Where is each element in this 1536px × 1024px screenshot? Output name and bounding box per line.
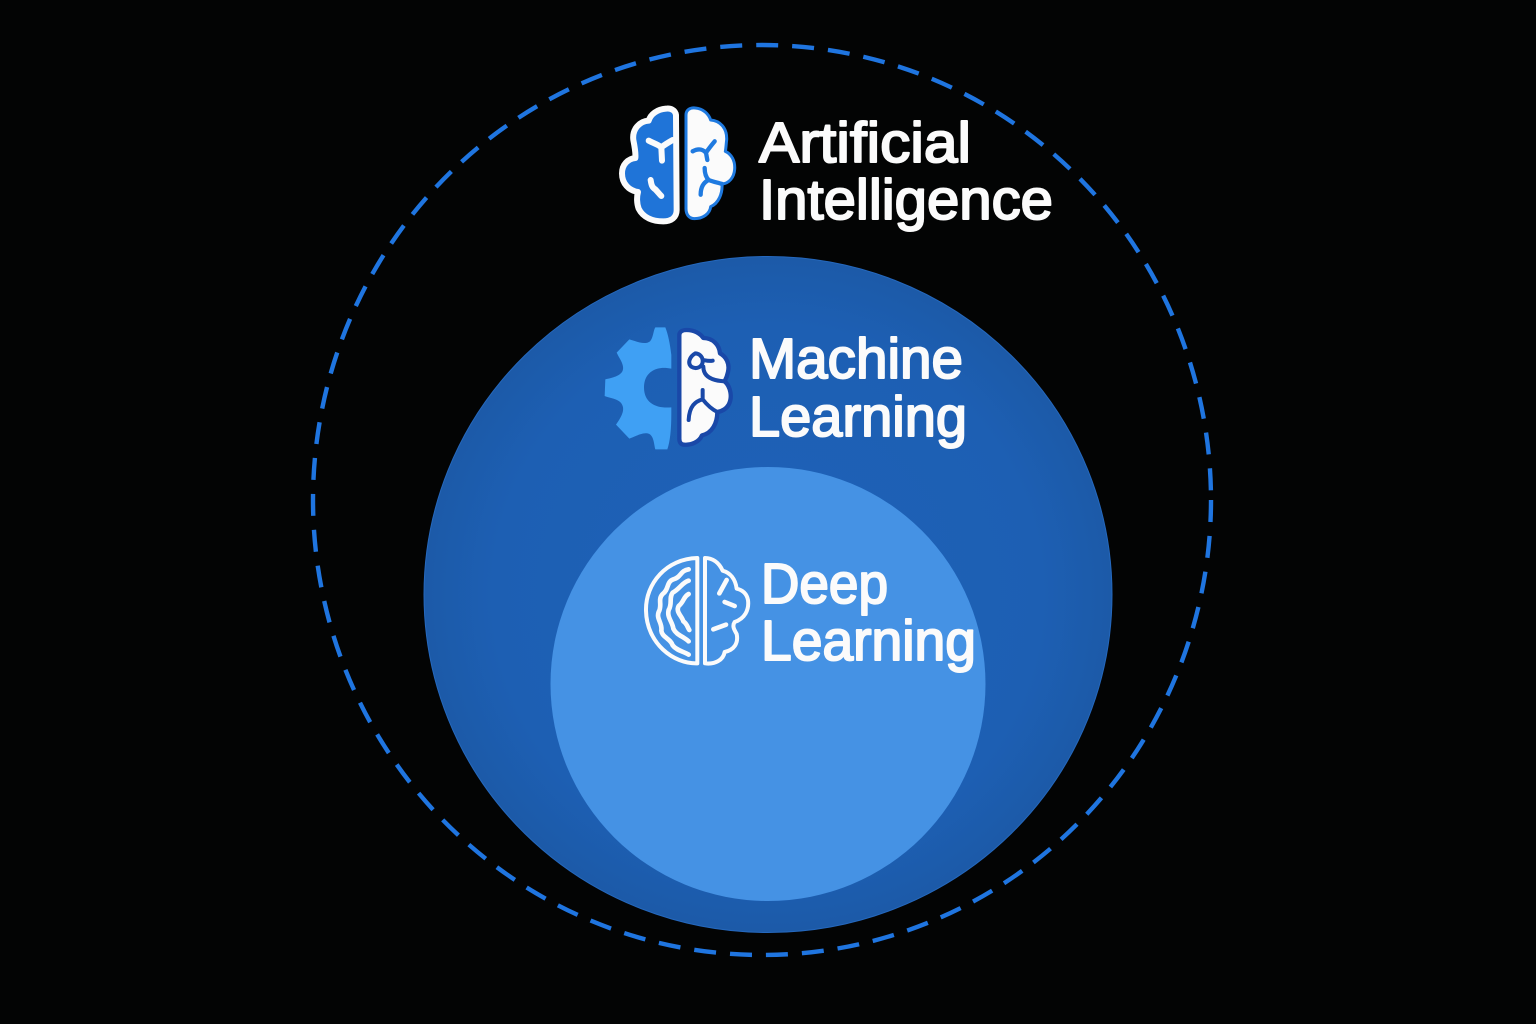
heading: Artificial Intelligence: Artificial	[759, 111, 971, 175]
icon: half brain	[679, 330, 731, 445]
circle: Machine Learning	[424, 256, 1112, 932]
heading: Artificial Intelligence	[759, 111, 1053, 232]
heading: Deep Learning: Deep	[761, 552, 888, 616]
icon: Machine Learning gear and brain	[605, 327, 731, 449]
heading: Machine Learning	[749, 327, 967, 449]
heading: Artificial Intelligence: Intelligence	[759, 168, 1053, 232]
heading: Deep Learning	[761, 552, 976, 673]
circle: Deep Learning	[550, 467, 986, 901]
heading: Machine Learning: Learning	[749, 385, 967, 449]
circle: Artificial Intelligence dashed boundary	[313, 45, 1211, 955]
icon: Deep Learning line brain	[646, 558, 748, 664]
icon: gear half	[605, 327, 671, 449]
heading: Machine Learning: Machine	[749, 327, 963, 391]
heading: Deep Learning: Learning	[761, 609, 976, 673]
icon: Artificial Intelligence brain	[622, 108, 735, 221]
